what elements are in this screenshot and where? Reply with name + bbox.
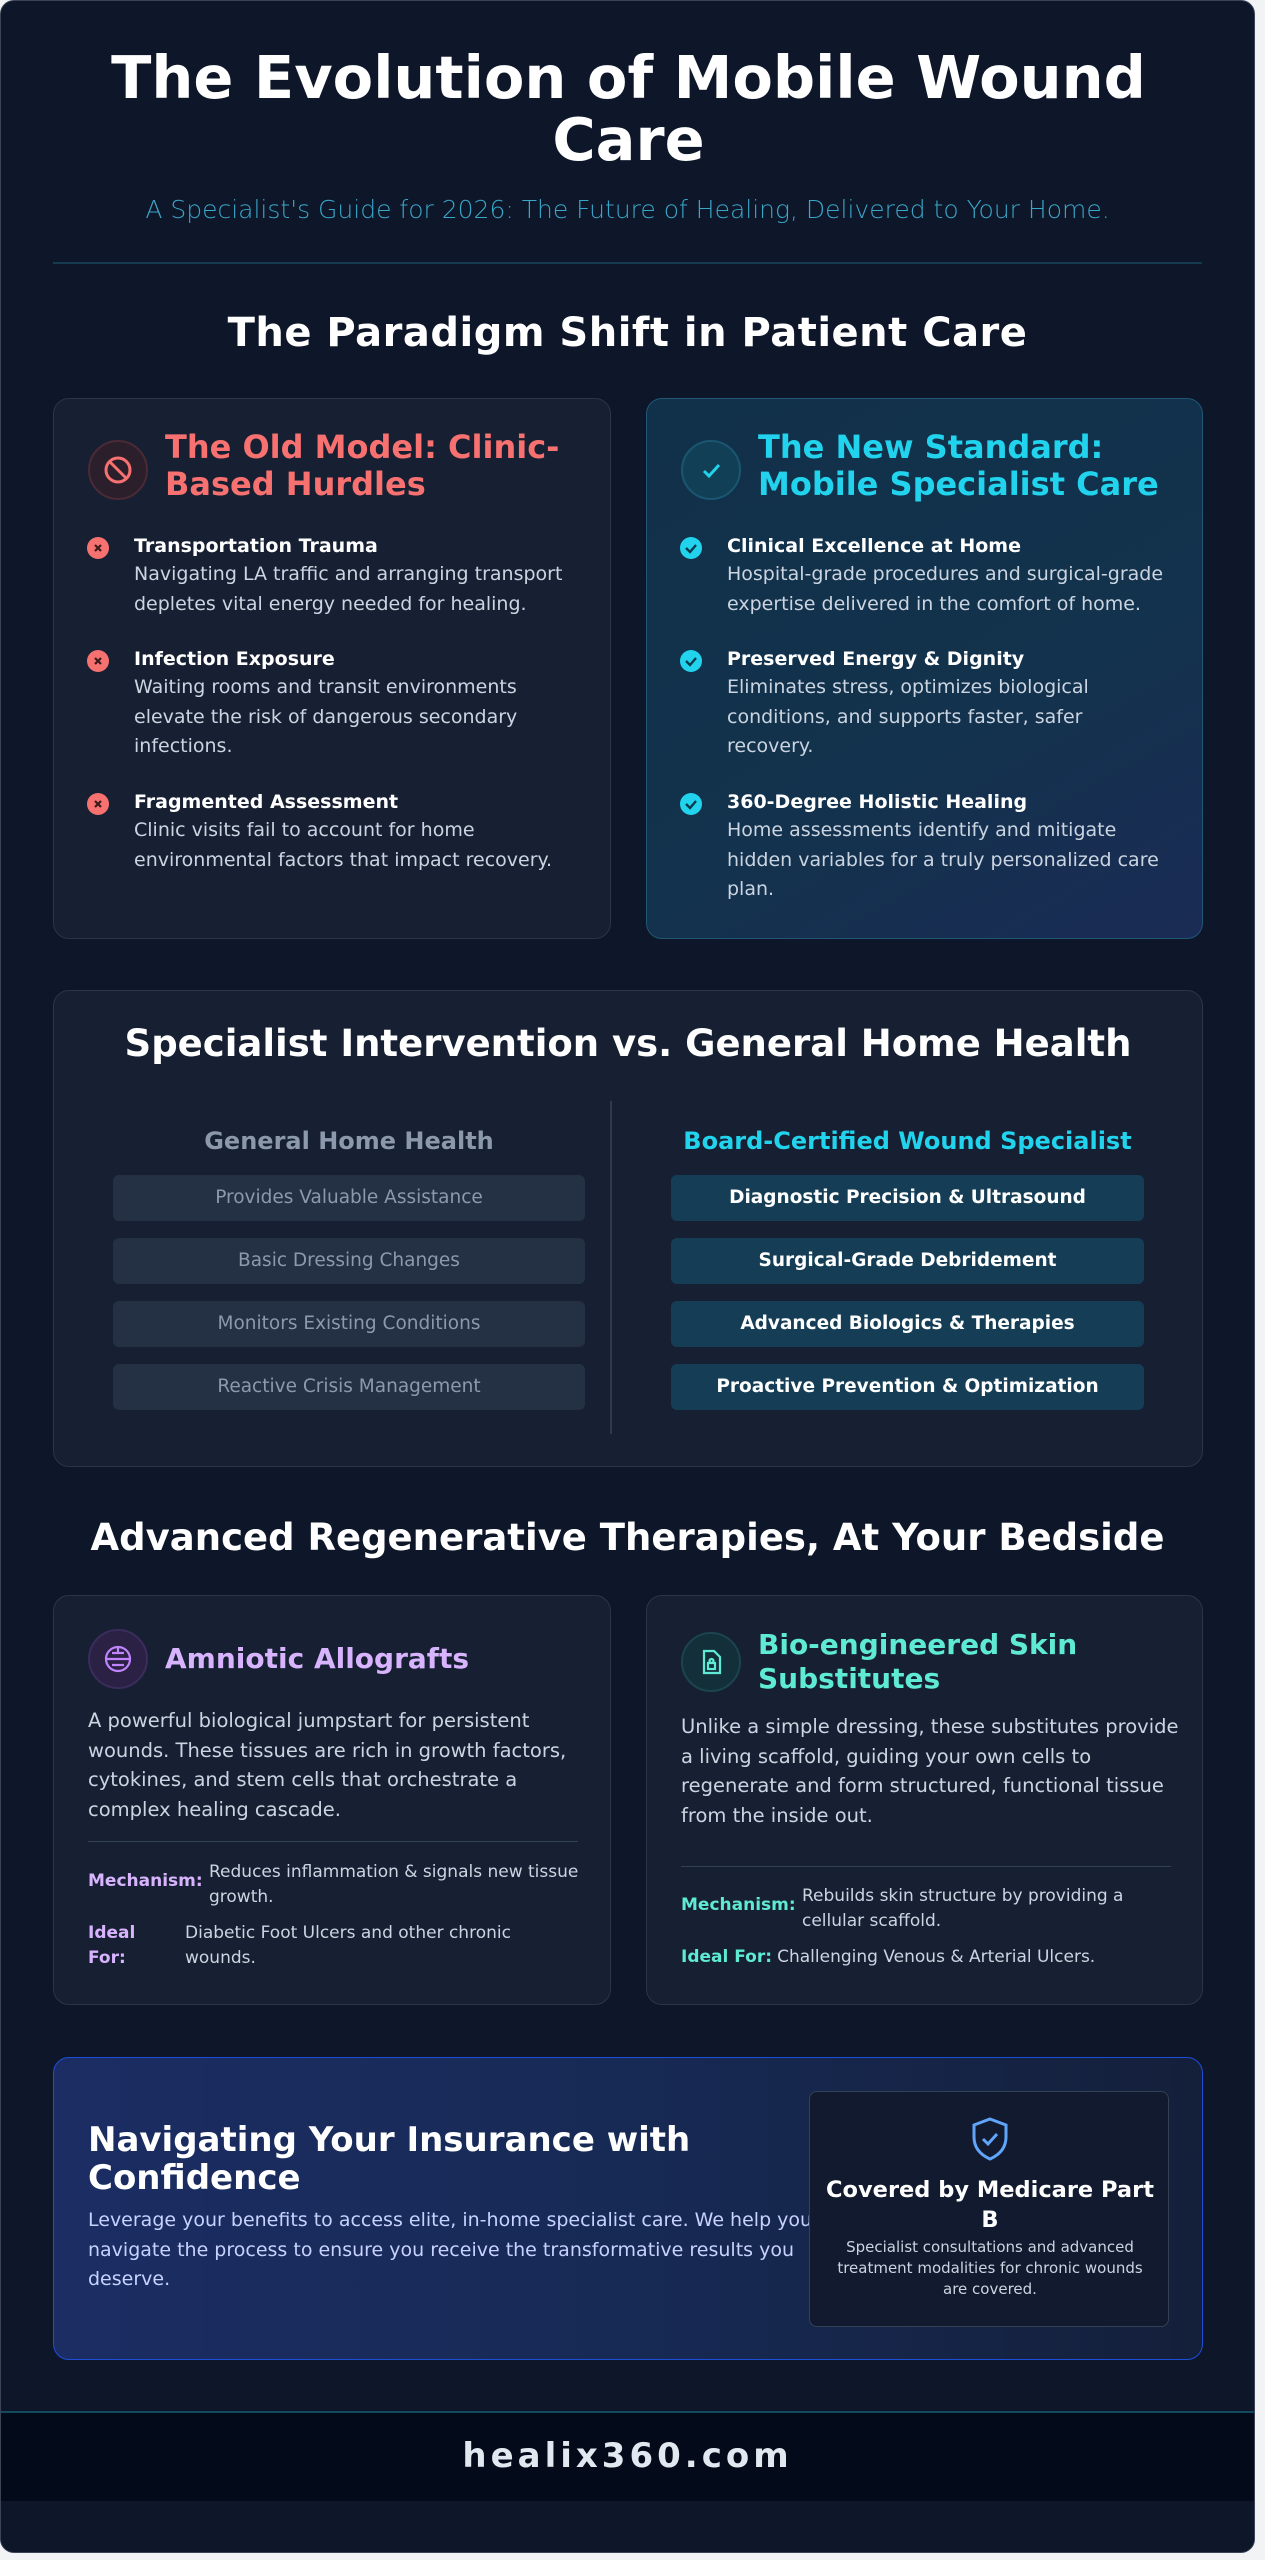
panel: comparison [53, 990, 1203, 1467]
description: A powerful biological jumpstart for persistent wounds. These tissues are rich in growth factors, cytokines, and stem cells that orchestrate a complex healing cascade. [88, 1709, 566, 1820]
item: infection: Waiting rooms and transit environments elevate the risk of dangerous secondary infections. [134, 676, 517, 757]
column: wound specialist: Advanced Biologics & Therapies [740, 1313, 1075, 1334]
heading: old model: Based Hurdles [165, 465, 426, 503]
item: infection: Infection Exposure [134, 648, 335, 670]
item: clinical excellence: Clinical Excellence at Home [727, 535, 1021, 557]
item: fragmented: Fragmented Assessment [134, 791, 398, 813]
heading: old model [165, 428, 559, 503]
panel: amniotic: Ideal [88, 1923, 135, 1943]
mechanism [681, 1886, 1123, 1931]
subhead: General Home Health [204, 1127, 494, 1155]
subhead: Board-Certified Wound Specialist [683, 1127, 1132, 1155]
column: wound specialist [671, 1127, 1144, 1410]
column: general home health: Basic Dressing Changes [238, 1250, 460, 1271]
heading [88, 2120, 690, 2198]
item: fragmented: Clinic visits fail to account for home environmental factors that impact recovery. [134, 819, 552, 870]
panel: amniotic: Reduces inflammation & signals new tissue growth. [209, 1862, 578, 1907]
heading: comparison: Specialist Intervention vs. General Home Health [125, 1022, 1131, 1065]
column: wound specialist: Diagnostic Precision & Ultrasound [729, 1187, 1086, 1208]
callout: medicare [809, 2091, 1169, 2327]
panel: amniotic [53, 1595, 611, 2005]
column: general home health: Provides Valuable Assistance [215, 1187, 483, 1208]
item: energy: Preserved Energy & Dignity [727, 648, 1024, 670]
heading: new standard: Mobile Specialist Care [758, 465, 1159, 503]
subtitle: A Specialist's Guide for 2026: The Future of Healing, Delivered to Your Home. [145, 195, 1110, 224]
item: holistic [680, 791, 1159, 900]
mechanism [88, 1862, 578, 1907]
item: holistic: Home assessments identify and mitigate hidden variables for a truly personalized care plan. [727, 819, 1159, 900]
panel: amniotic: Mechanism: [88, 1871, 203, 1891]
panel: skin substitutes: Rebuilds skin structure by providing a cellular scaffold. [802, 1886, 1123, 1931]
ideal for [88, 1923, 511, 1968]
column: general home health: Reactive Crisis Management [217, 1376, 481, 1397]
heading: paradigm shift: The Paradigm Shift in Patient Care [228, 310, 1027, 356]
ideal for: Ideal For: Challenging Venous & Arterial Ulcers. [681, 1947, 1095, 1967]
footer [1, 2411, 1254, 2501]
description: Unlike a simple dressing, these substitutes provide a living scaffold, guiding your own cells to regenerate and form structured, functional tissue from the inside out. [681, 1715, 1179, 1826]
heading: new standard [758, 428, 1159, 503]
footer: healix360.com [462, 2436, 793, 2476]
item: energy [680, 648, 1089, 757]
callout: medicare: Covered by Medicare Part B [826, 2177, 1154, 2233]
panel: skin substitutes: Mechanism: [681, 1895, 796, 1915]
heading: Amniotic Allografts [165, 1642, 469, 1675]
column: general home health [113, 1127, 585, 1410]
title: The Evolution of Mobile Wound Care [111, 43, 1146, 174]
item: holistic: 360-Degree Holistic Healing [727, 791, 1027, 813]
icon: skin [681, 1632, 741, 1692]
heading: Bio-engineered Skin [758, 1628, 1077, 1661]
callout: medicare: Specialist consultations and advanced treatment modalities for chronic wounds are covered. [837, 2238, 1143, 2298]
icon: prohibited [88, 440, 148, 500]
icon: check [681, 440, 741, 500]
item: clinical excellence: Hospital-grade procedures and surgical-grade expertise delivered in the comfort of home. [727, 563, 1163, 614]
panel: insurance [53, 2057, 1203, 2360]
panel: skin substitutes [646, 1595, 1203, 2005]
heading: old model: The Old Model: Clinic- [165, 428, 559, 466]
column: general home health: Monitors Existing Conditions [218, 1313, 480, 1334]
panel: amniotic: For: [88, 1948, 126, 1968]
heading: new standard: The New Standard: [758, 428, 1103, 466]
item: transportation: Navigating LA traffic and arranging transport depletes vital energy needed for healing. [134, 563, 562, 614]
heading: Confidence [88, 2158, 301, 2198]
heading: therapies: Advanced Regenerative Therapies, At Your Bedside [91, 1516, 1164, 1559]
panel: amniotic: Diabetic Foot Ulcers and other chronic wounds. [185, 1923, 511, 1968]
column: wound specialist: Proactive Prevention & Optimization [716, 1376, 1099, 1397]
item: clinical excellence [680, 535, 1163, 614]
item: infection [87, 648, 517, 757]
item: energy: Eliminates stress, optimizes biological conditions, and supports faster, safer recovery. [727, 676, 1089, 757]
heading [758, 1628, 1077, 1695]
panel: old model [53, 398, 611, 939]
icon: shield [972, 2117, 1008, 2161]
heading: Substitutes [758, 1662, 940, 1695]
item: transportation: Transportation Trauma [134, 535, 378, 557]
heading: Navigating Your Insurance with [88, 2120, 690, 2160]
item: transportation [87, 535, 562, 614]
item: fragmented [87, 791, 552, 870]
icon: amniotic [88, 1629, 148, 1689]
body text: Leverage your benefits to access elite, in-home specialist care. We help you navigate the process to ensure you receive the transformative results you deserve. [88, 2209, 812, 2290]
panel: new standard [646, 398, 1203, 939]
column: wound specialist: Surgical-Grade Debridement [759, 1250, 1056, 1271]
